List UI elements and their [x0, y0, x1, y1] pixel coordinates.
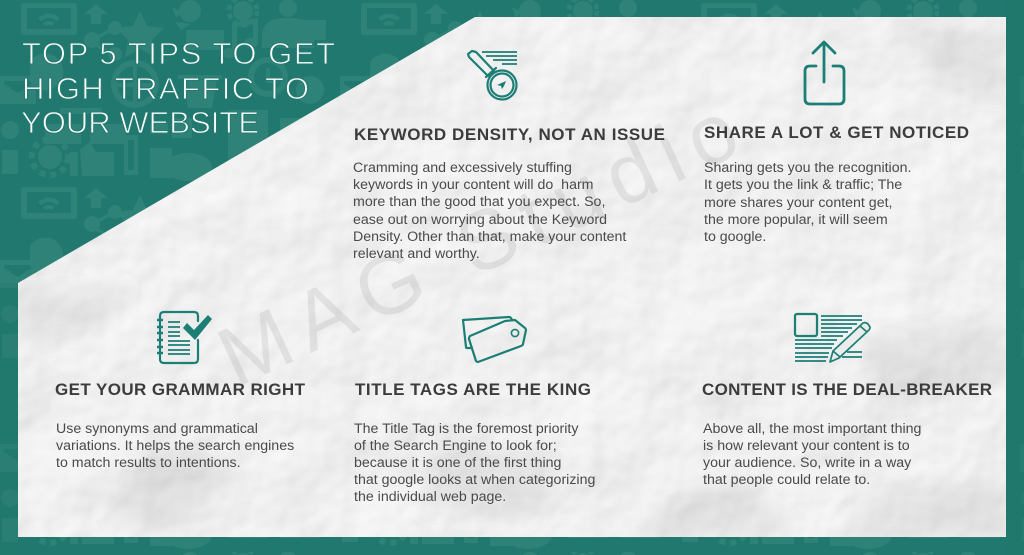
text: keyword density: keywords in your content will do harm — [353, 177, 594, 193]
heading: content: CONTENT IS THE DEAL-BREAKER — [702, 380, 992, 399]
icon: grammar checklist — [157, 312, 212, 363]
text: title tags: of the Search Engine to look for; — [354, 438, 557, 454]
icon: title tags — [463, 317, 526, 362]
icon: content with pencil — [795, 314, 870, 362]
text: title tags: the individual web page. — [354, 489, 506, 505]
text: keyword density: Cramming and excessively stuffing — [353, 160, 572, 176]
text: keyword density: more than the good that you expect. So, — [353, 194, 605, 210]
text: title tags: because it is one of the first thing — [354, 455, 561, 471]
title: TOP 5 TIPS TO GET — [22, 36, 335, 71]
text: grammar: variations. It helps the search engines — [56, 438, 294, 454]
title: HIGH TRAFFIC TO — [22, 71, 309, 106]
text: content: your audience. So, write in a way — [703, 455, 912, 471]
heading: title tags: TITLE TAGS ARE THE KING — [355, 380, 591, 399]
text: grammar: to match results to intentions. — [56, 455, 241, 471]
heading: share: SHARE A LOT & GET NOTICED — [704, 123, 969, 142]
watermark: MAG Studio — [204, 77, 763, 404]
text: share: to google. — [704, 229, 766, 245]
text: content: that people could relate to. — [703, 472, 870, 488]
title: YOUR WEBSITE — [21, 105, 259, 140]
text: content: is how relevant your content is to — [703, 438, 910, 454]
text: title tags: The Title Tag is the foremost priority — [354, 421, 579, 437]
heading: keyword density: KEYWORD DENSITY, NOT AN ISSUE — [354, 125, 665, 144]
icon: keyword key — [468, 51, 517, 100]
heading: grammar: GET YOUR GRAMMAR RIGHT — [55, 380, 306, 399]
text: share: more shares your content get, — [704, 195, 892, 211]
icon: share — [805, 42, 844, 104]
text: share: Sharing gets you the recognition. — [704, 160, 911, 176]
text: grammar: Use synonyms and grammatical — [56, 421, 258, 437]
text: keyword density: Density. Other than that, make your content — [353, 229, 626, 245]
text: keyword density: ease out on worrying about the Keyword — [353, 212, 607, 228]
text: share: It gets you the link & traffic; The — [704, 177, 902, 193]
text: share: the more popular, it will seem — [704, 212, 888, 228]
title — [21, 36, 335, 140]
text: keyword density: relevant and worthy. — [353, 246, 480, 262]
text: content: Above all, the most important thing — [703, 421, 921, 437]
text: title tags: that google looks at when categorizing — [354, 472, 595, 488]
